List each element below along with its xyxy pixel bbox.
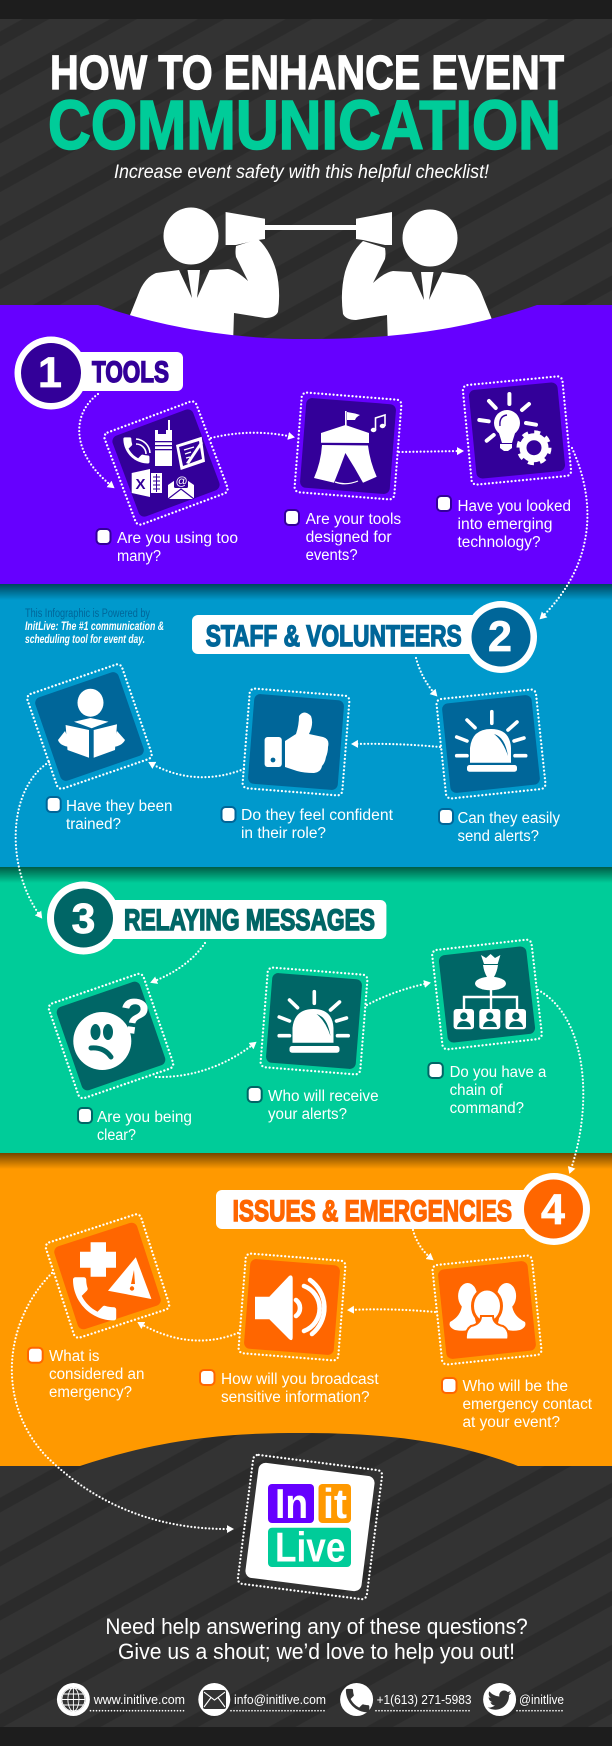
logo: InitLive: In <box>275 1480 308 1527</box>
panel: issues and emergencies <box>0 1153 612 1466</box>
contact: website: www.initlive.com <box>93 1692 185 1707</box>
contact: email: info@initlive.com <box>234 1692 326 1707</box>
arrow: contacts to speaker <box>349 1309 435 1312</box>
logo: InitLive: Live <box>275 1524 346 1571</box>
checkbox question: what is an emergency: What is <box>49 1348 100 1365</box>
arrow: thumbs up to book <box>150 763 244 777</box>
arrow: staff to relaying section <box>16 762 49 917</box>
checkbox question: chain of command: command? <box>450 1100 524 1117</box>
checkbox question: too many tools: many? <box>117 548 161 565</box>
contact: twitter <box>483 1683 564 1716</box>
checkbox question: what is an emergency <box>28 1348 144 1401</box>
checkbox question: emergency contact: emergency contact <box>462 1396 593 1413</box>
checkbox question: designed for events: events? <box>306 547 358 564</box>
checkbox question: designed for events: designed for <box>306 529 392 546</box>
checkbox question: easily send alerts <box>439 809 560 845</box>
panel: dark footer <box>0 1433 612 1746</box>
arrow: tools heading to first icon <box>79 394 113 487</box>
arrow: staff heading to first icon <box>416 658 436 695</box>
heading: tools <box>14 336 183 410</box>
arrow: tools icon two to three <box>399 451 462 452</box>
heading: staff and volunteers: 2 <box>488 613 512 661</box>
panel: relaying messages <box>0 867 612 1153</box>
logo: InitLive: it <box>323 1480 347 1527</box>
checkbox question: being clear: Are you being <box>97 1109 192 1126</box>
checkbox question: emerging technology: Have you looked <box>458 498 571 515</box>
icon: alert siren <box>260 967 368 1075</box>
heading: issues and emergencies: ISSUES & EMERGENCIES <box>233 1195 512 1228</box>
checkbox question: been trained <box>47 797 173 833</box>
icon: confused face <box>47 972 175 1100</box>
icon: speaker broadcast <box>238 1253 346 1361</box>
icon: communication tools: @ <box>176 474 188 488</box>
arrow: tools to staff section <box>541 448 587 618</box>
checkbox question: emergency contact <box>442 1378 593 1431</box>
panel: staff and volunteers <box>0 584 612 867</box>
checkbox question: designed for events: Are your tools <box>306 511 401 528</box>
checkbox question: broadcast sensitive information <box>200 1370 379 1406</box>
logo: InitLive <box>237 1454 383 1600</box>
checkbox question: emergency contact: at your event? <box>462 1414 560 1431</box>
checkbox question: receive alerts: your alerts? <box>268 1106 347 1123</box>
arrow: tools icon one to two <box>211 433 293 438</box>
checkbox question: too many tools: Are you using too <box>117 530 238 547</box>
checkbox question: receive alerts <box>248 1087 379 1123</box>
powered by note <box>25 608 164 646</box>
icon: person reading book <box>26 663 153 790</box>
heading: relaying messages: RELAYING MESSAGES <box>124 904 375 937</box>
checkbox question: designed for events <box>285 510 401 564</box>
call to action text: Need help answering any of these questions? <box>105 1614 528 1639</box>
contact: phone <box>340 1683 472 1716</box>
icon: medical cross, phone and warning <box>44 1213 171 1339</box>
checkbox question: confident in role <box>222 807 394 842</box>
contact: website <box>57 1683 185 1716</box>
heading: issues and emergencies: 4 <box>541 1186 565 1234</box>
checkbox question: emerging technology <box>437 496 571 551</box>
icon: communication tools: X <box>136 476 146 493</box>
heading: tools: TOOLS <box>92 356 169 389</box>
powered by note: scheduling tool for event day. <box>25 634 145 646</box>
contact: twitter: @initlive <box>519 1692 564 1707</box>
contact: email <box>198 1683 326 1716</box>
checkbox question: emerging technology: into emerging <box>458 516 552 533</box>
checkbox question: being clear: clear? <box>97 1127 136 1144</box>
checkbox question: emergency contact: Who will be the <box>462 1378 568 1395</box>
arrow: medical icon to logo <box>12 1273 232 1529</box>
heading: staff and volunteers <box>192 601 537 673</box>
top dark bar <box>0 0 612 19</box>
checkbox question: been trained: trained? <box>66 816 121 833</box>
icon: thumbs up <box>242 688 350 796</box>
heading: issues and emergencies <box>216 1173 590 1245</box>
heading: tools: 1 <box>38 349 62 397</box>
powered by note: InitLive: The #1 communication & <box>25 621 164 633</box>
checkbox question: broadcast sensitive information: How will you broadcast <box>221 1371 379 1388</box>
arrow: speaker to medical icon <box>139 1323 238 1341</box>
icon: lightbulb and gear <box>462 376 572 485</box>
checkbox question: emerging technology: technology? <box>458 534 541 551</box>
checkbox question: been trained: Have they been <box>66 798 172 815</box>
call to action text <box>105 1614 528 1664</box>
icon: communication tools <box>103 400 229 526</box>
checkbox question: chain of command: chain of <box>450 1082 503 1099</box>
panel: tools <box>0 305 612 584</box>
checkbox question: receive alerts: Who will receive <box>268 1088 379 1105</box>
checkbox question: chain of command: Do you have a <box>450 1064 547 1081</box>
arrow: face to alert <box>156 1043 255 1077</box>
checkbox question: easily send alerts: send alerts? <box>458 828 539 845</box>
powered by note: This Infographic is Powered by <box>25 608 150 620</box>
arrow: relaying heading to face <box>152 943 205 982</box>
checkbox question: too many tools <box>96 529 238 565</box>
arrow: issues heading to contacts icon <box>413 1230 432 1259</box>
checkbox question: broadcast sensitive information: sensitive information? <box>221 1389 370 1406</box>
icon: alert siren <box>436 689 546 799</box>
arrow: alert to thumbs up <box>353 744 440 747</box>
call to action text: Give us a shout; we’d love to help you out! <box>118 1639 515 1664</box>
checkbox question: chain of command <box>428 1063 547 1117</box>
checkbox question: what is an emergency: emergency? <box>49 1384 132 1401</box>
checkbox question: easily send alerts: Can they easily <box>458 810 560 827</box>
icon: chain of command <box>432 939 542 1050</box>
icon: emergency contacts <box>432 1255 542 1365</box>
heading: relaying messages <box>47 882 386 954</box>
contact: phone: +1(613) 271-5983 <box>377 1692 472 1707</box>
heading: staff and volunteers: STAFF & VOLUNTEERS <box>206 620 462 653</box>
icon: confused face: ? <box>115 987 153 1046</box>
icon: event tent <box>294 392 402 500</box>
arrow: relaying to issues section <box>538 990 583 1172</box>
checkbox question: being clear <box>78 1108 192 1144</box>
subtitle: Increase event safety with this helpful checklist! <box>114 162 490 183</box>
panel: dark header background <box>0 0 612 340</box>
icon: two people with tin-can phone <box>120 208 501 347</box>
heading: relaying messages: 3 <box>72 895 95 943</box>
arrow: alert to chain of command <box>367 983 429 1005</box>
checkbox question: confident in role: in their role? <box>241 825 326 842</box>
bottom dark bar <box>0 1727 612 1746</box>
checkbox question: confident in role: Do they feel confident <box>241 807 394 824</box>
checkbox question: what is an emergency: considered an <box>49 1366 144 1383</box>
